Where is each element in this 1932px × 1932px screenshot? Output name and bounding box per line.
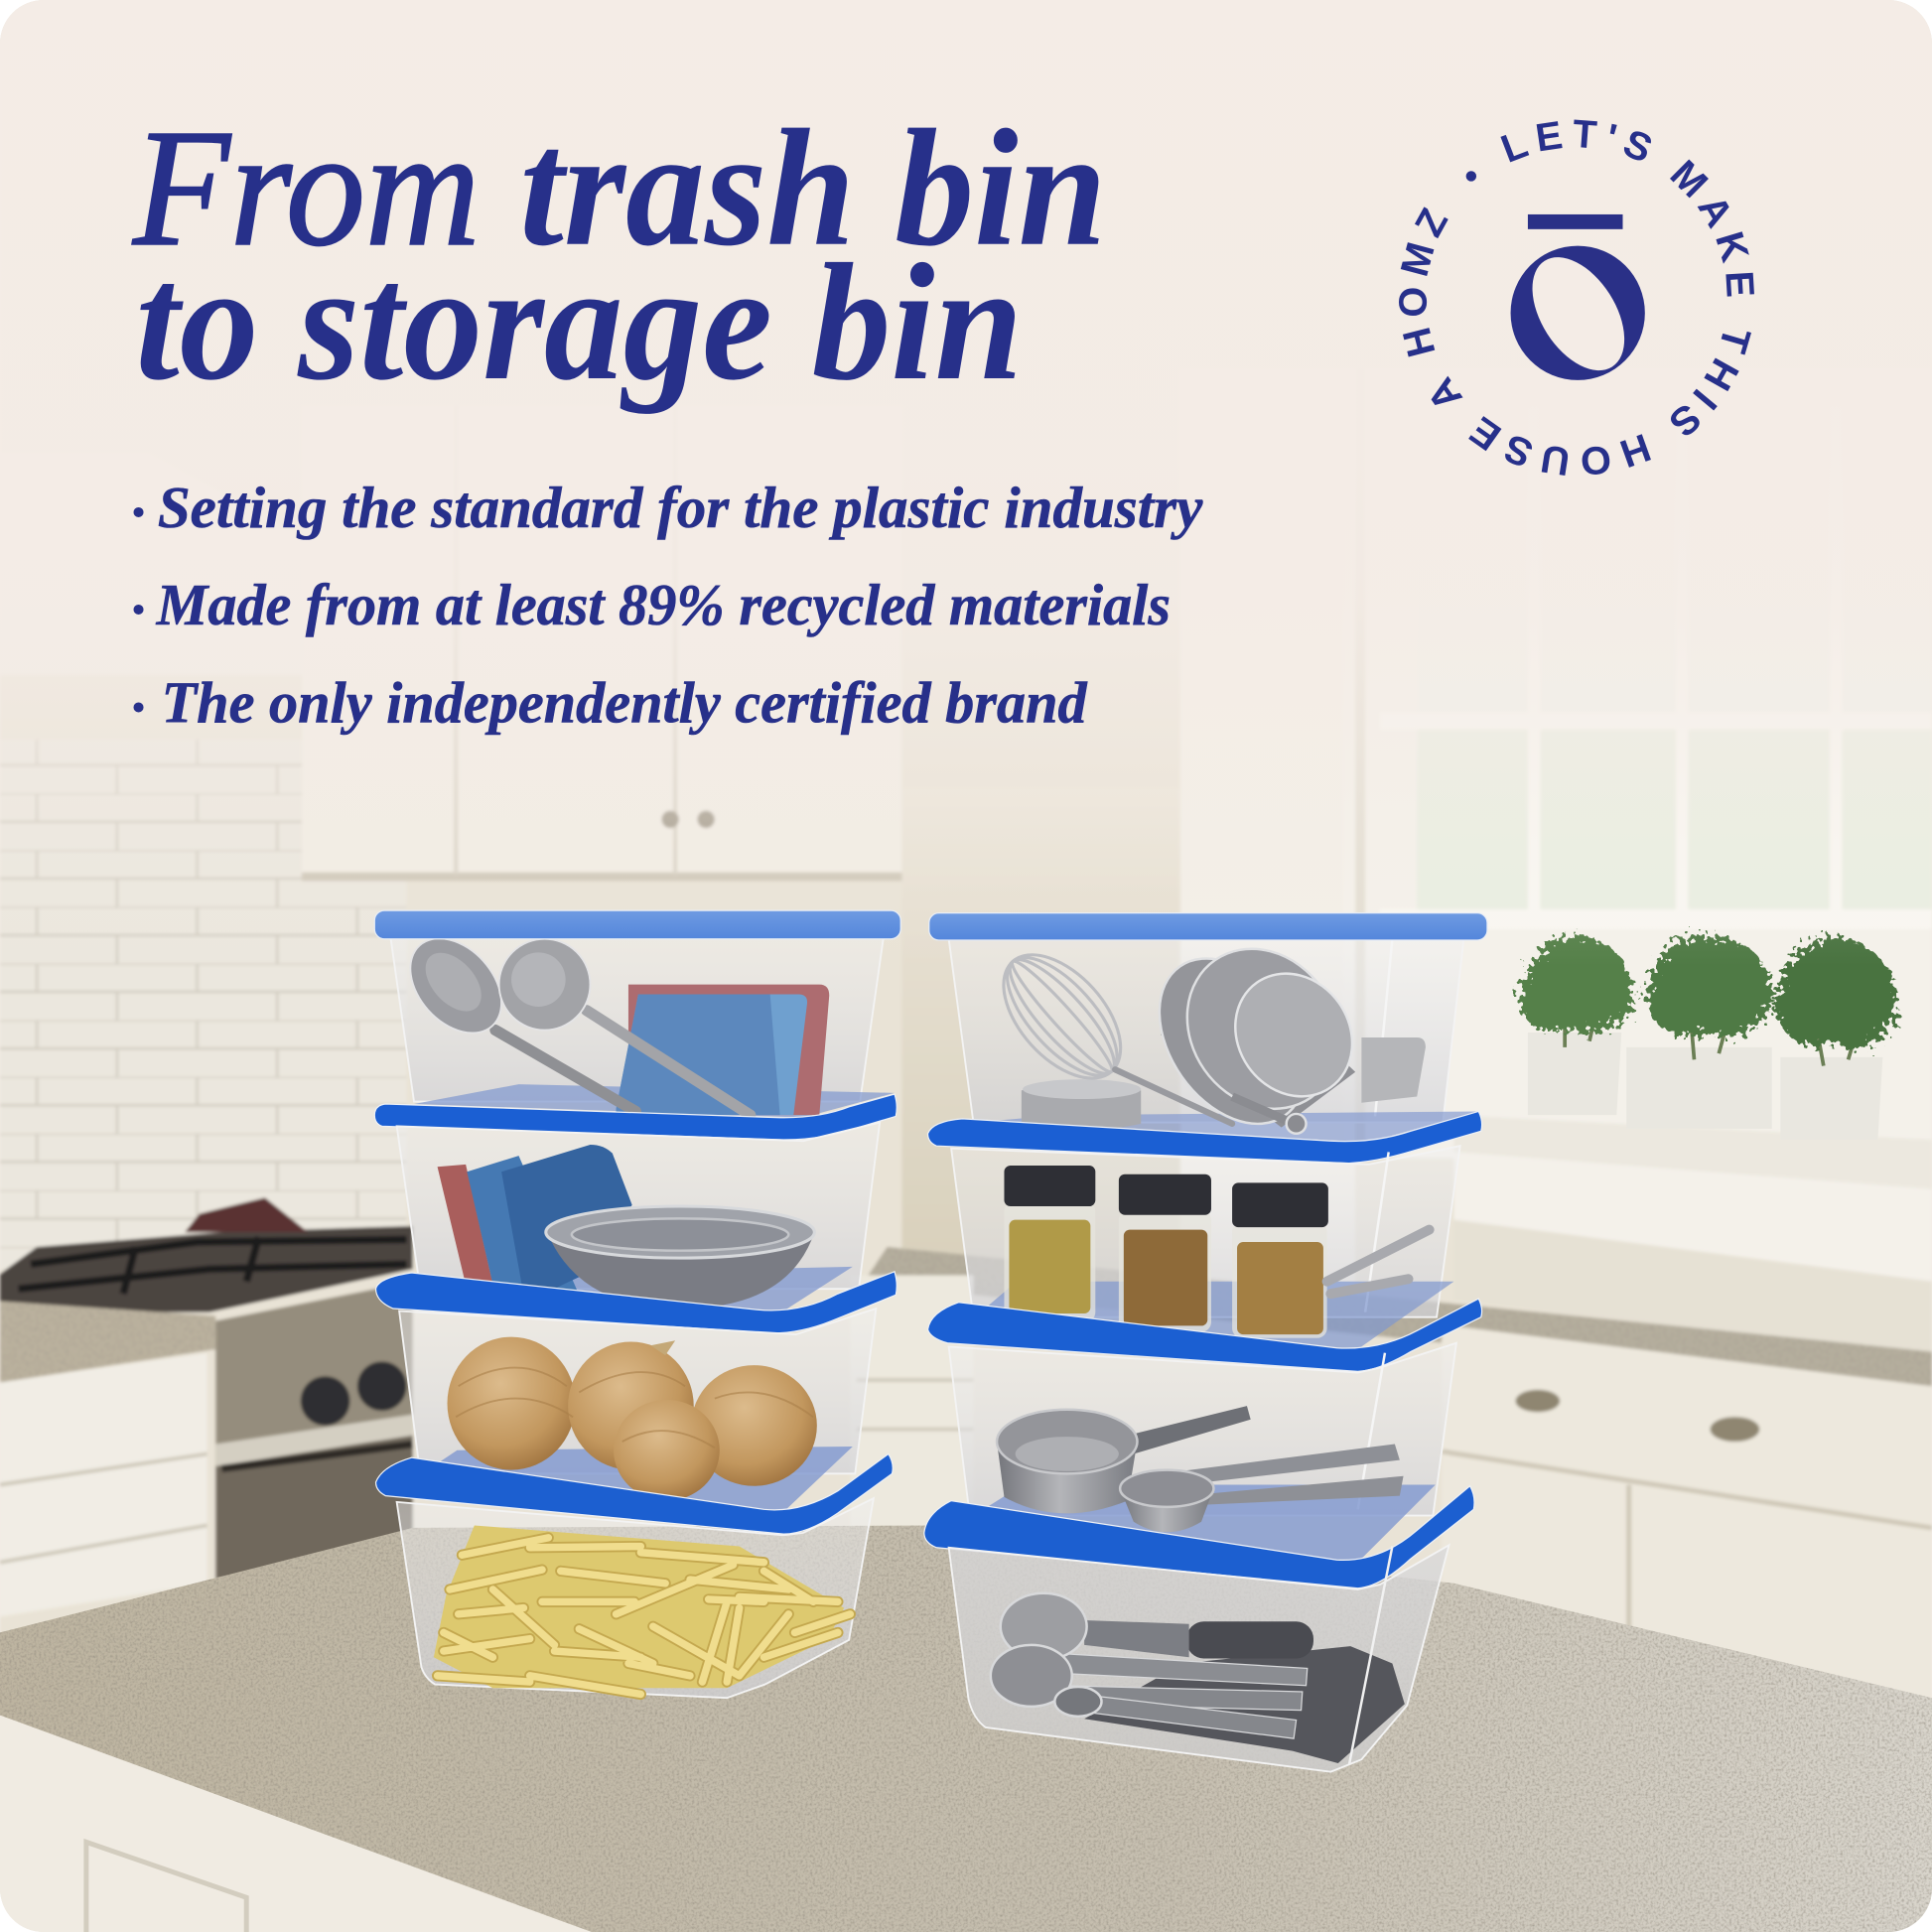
plants on window sill [1518,936,1896,1140]
container 3: measuring cups [949,1343,1456,1563]
lid 4 rim [376,1453,893,1534]
container 4: pasta [397,1498,874,1698]
middle cabinet [850,1276,973,1528]
logo macron bar [1528,214,1622,229]
bullet list: • [132,591,145,631]
headline: From trash bin [132,95,1106,281]
bullet list: Setting the standard for the plastic industry [158,475,1203,540]
lid 2 rim [374,1094,897,1140]
lid 2 rim [928,1111,1482,1164]
logo badge [1399,119,1754,476]
lid 3 rim [376,1272,897,1333]
headline [132,95,1106,415]
bullet list: Made from at least 89% recycled materials [156,572,1171,637]
bullet list: • [132,493,145,534]
container 2: spice jars [951,1146,1460,1349]
container 1: ladles and boards [390,920,895,1118]
container 4: spoons and mat [949,1545,1449,1772]
stove [0,1197,413,1580]
container 2: boards and bowl [397,1123,880,1311]
left container stack [374,910,900,1698]
left tiled backsplash [0,740,407,1269]
lid 3 rim [928,1299,1482,1371]
container 3: onions [399,1309,876,1512]
window [1343,369,1932,1159]
lid 4 rim [924,1486,1474,1588]
right container stack [924,913,1487,1772]
bullet list: • [132,688,145,729]
left drawers [0,1353,207,1616]
wall behind containers [901,788,1182,1282]
island front edge [0,1716,592,1932]
lower right cabinets [1442,1324,1932,1701]
back counter right [863,1247,1932,1392]
upper cabinets [302,407,901,881]
headline: to storage bin [136,229,1023,415]
logo letter o [1511,241,1645,386]
bullet list: The only independently certified brand [162,669,1088,735]
window sill and lower wall [1453,1115,1932,1282]
lid 1 [929,913,1487,940]
lid 1 [374,910,900,939]
range hood [0,454,492,675]
island countertop [0,1525,1932,1932]
left counter [0,1302,215,1382]
bullet list [132,475,1203,735]
circular slogan: LET'S MAKE THIS HOUSE A HOMZ [1399,119,1754,476]
container 1: whisk and cups [949,919,1478,1152]
wall column and window frame [1180,369,1355,1307]
